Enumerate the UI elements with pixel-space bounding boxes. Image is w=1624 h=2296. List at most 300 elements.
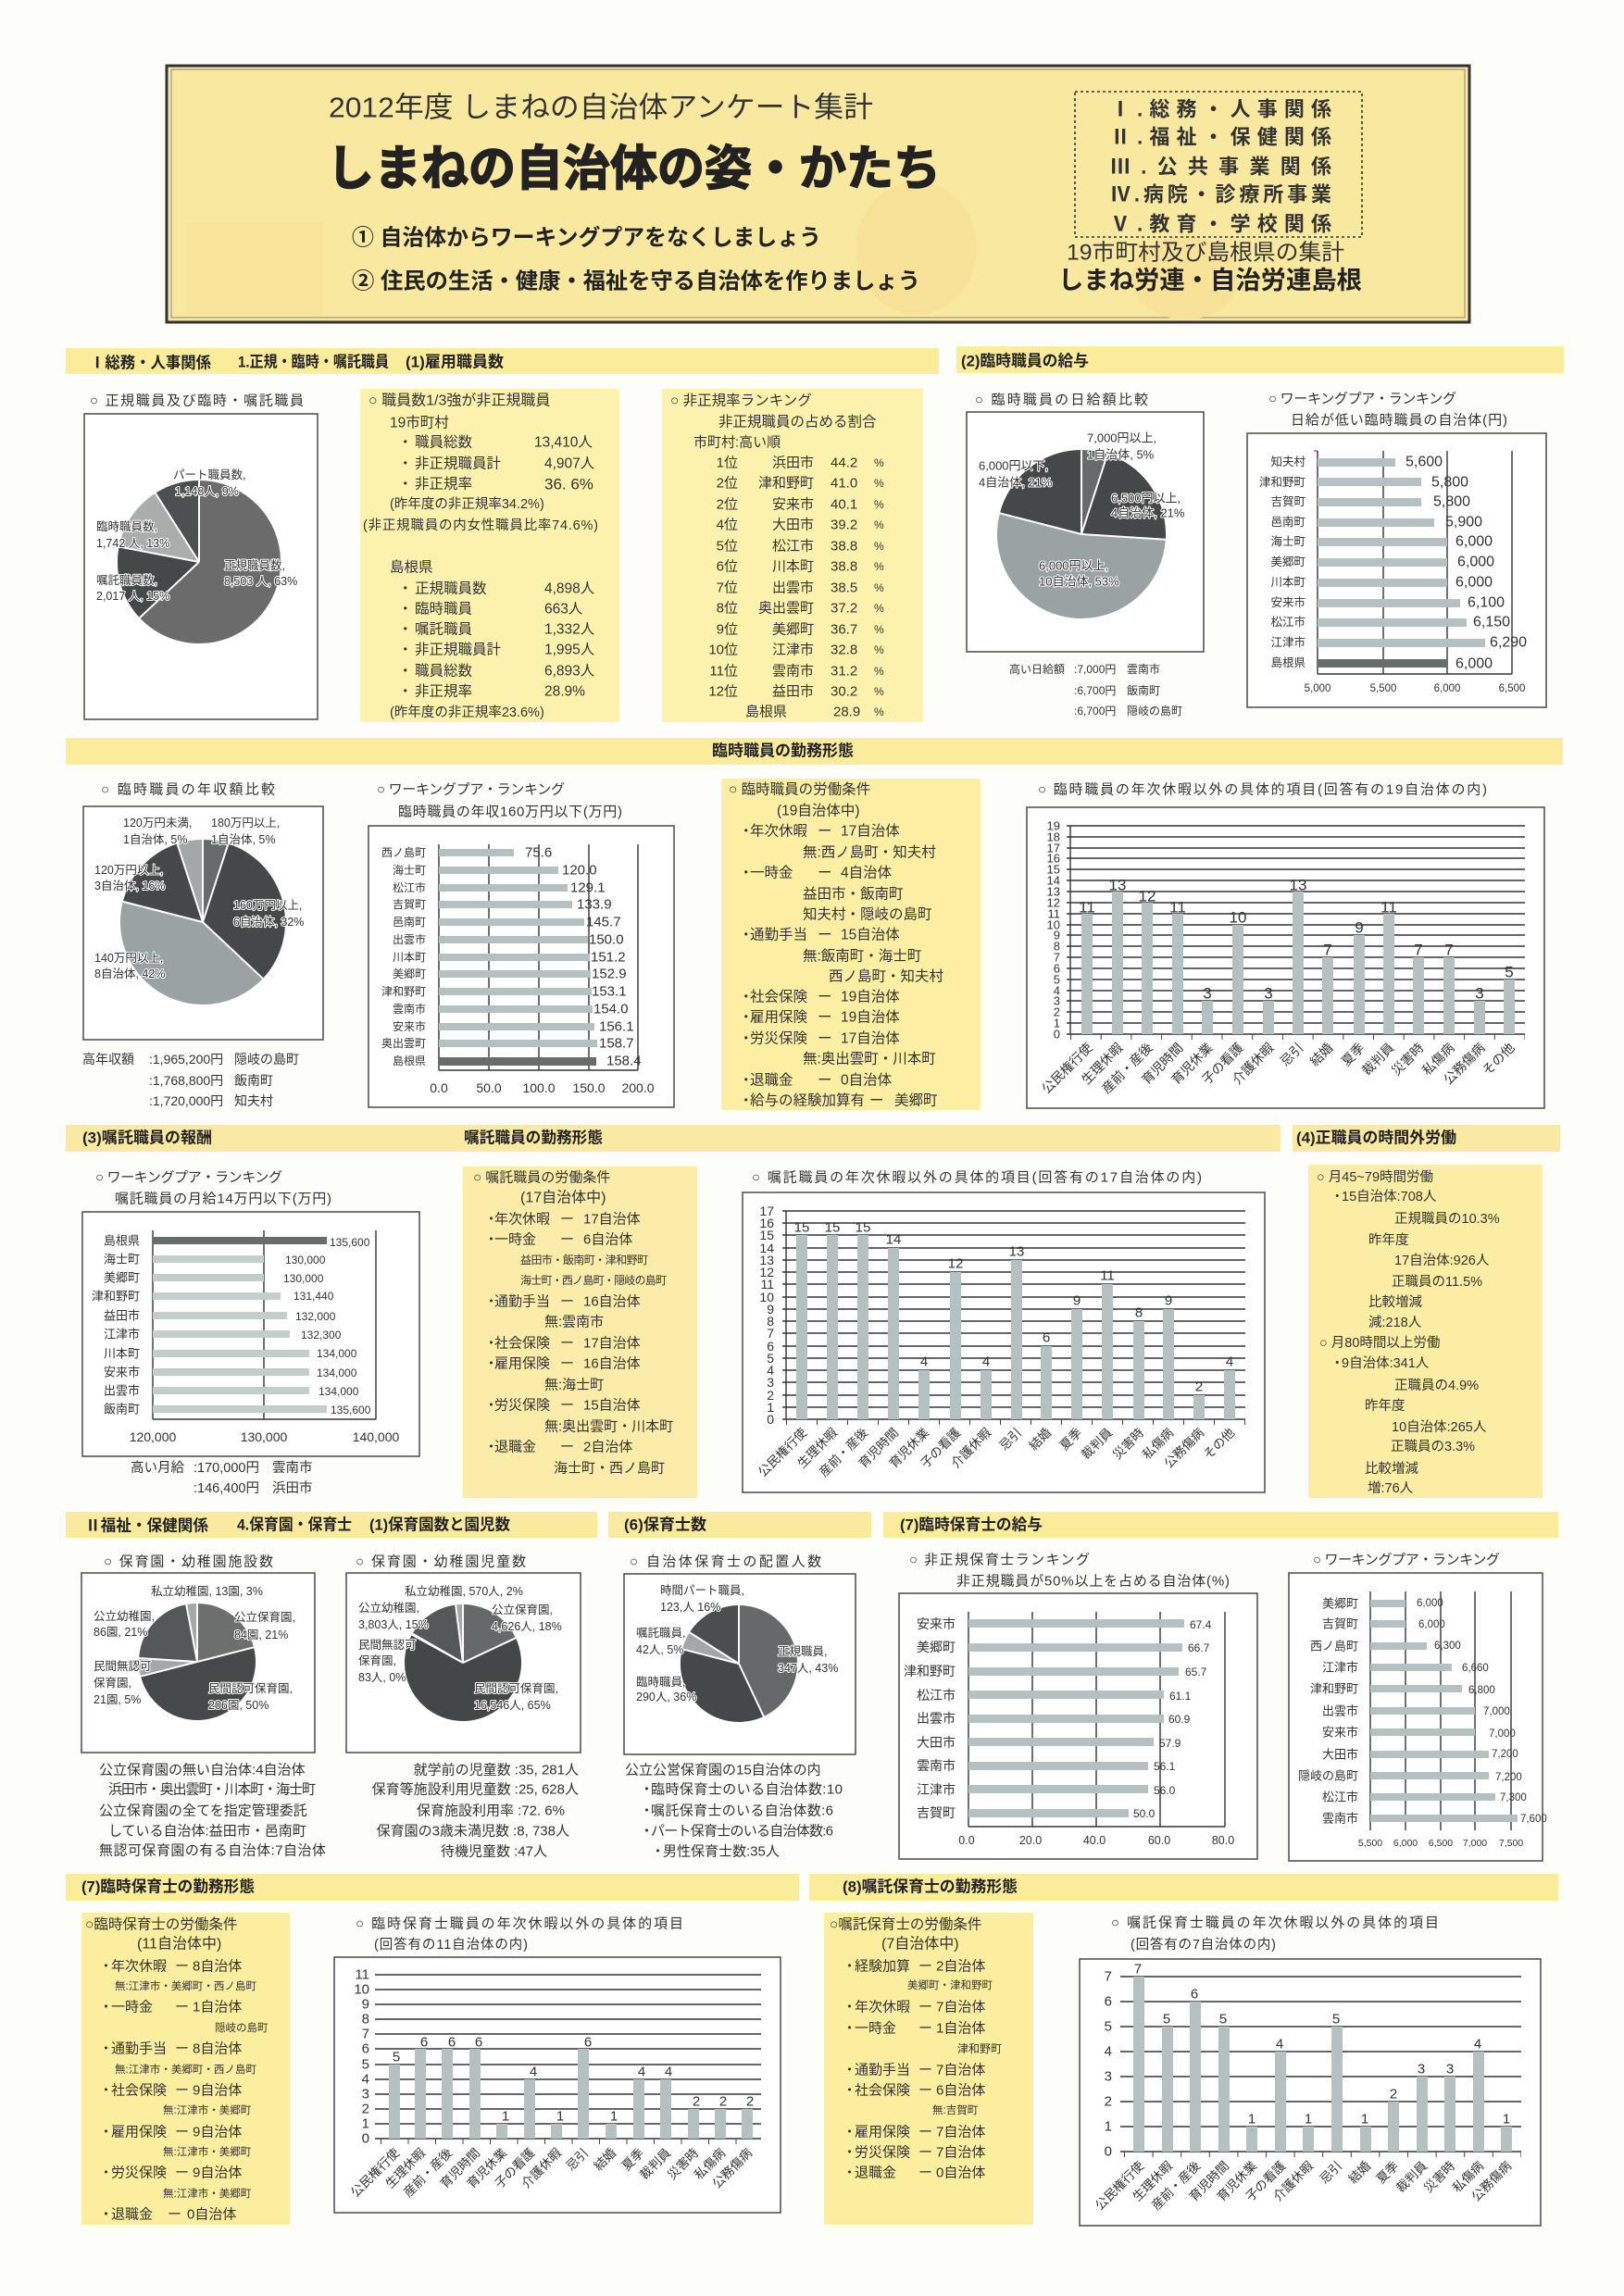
bar chart: 江津市 xyxy=(104,1328,140,1341)
panel: non-regular rate ranking: 雲南市 xyxy=(772,663,814,680)
bar chart: 島根県 xyxy=(104,1233,140,1248)
bar chart: 6,100 xyxy=(1468,594,1505,611)
highest income note: :1,965,200円 xyxy=(149,1052,223,1067)
column chart: 公務傷病 xyxy=(1162,1426,1206,1470)
panel: annual income pie xyxy=(82,781,323,1108)
panel: commissioned staff conditions: ー xyxy=(560,1335,574,1352)
panel: commissioned staff conditions: ・ xyxy=(484,1439,498,1455)
column chart: 私傷病 xyxy=(1140,1426,1176,1462)
panel: commissioned nursery teacher conditions: 0自治体 xyxy=(936,2165,985,2181)
panel: overtime: 比較増減 xyxy=(1368,1294,1422,1310)
panel: non-regular staff summary: 1,995人 xyxy=(544,643,595,657)
panel: commissioned nursery teacher conditions: ・ xyxy=(843,2020,856,2037)
panel: non-regular rate ranking: 大田市 xyxy=(772,517,814,533)
section bar: general affairs: Ⅰ総務・人事関係 xyxy=(90,354,211,372)
column chart: 生理休暇 xyxy=(1131,2159,1175,2203)
bar chart: 美郷町 xyxy=(1322,1596,1358,1611)
bar chart: 132,000 xyxy=(295,1310,336,1323)
nursery notes: 公立保育園の無い自治体:4自治体 xyxy=(99,1763,306,1778)
panel: temporary staff conditions: 15自治体 xyxy=(841,926,900,942)
pie labels: 206園, 50% xyxy=(208,1699,269,1712)
bar chart: 130,000 xyxy=(241,1429,288,1444)
panel: temporary staff conditions: ー xyxy=(818,1009,832,1026)
bar chart: 20.0 xyxy=(1019,1834,1042,1847)
pie labels: 1自治体, 5% xyxy=(211,833,275,846)
column chart: 産前・産後 xyxy=(400,2145,456,2200)
panel: non-regular rate ranking: % xyxy=(874,623,884,636)
bar chart: 134,000 xyxy=(319,1385,359,1398)
pie labels: 347人, 43% xyxy=(778,1662,838,1675)
panel: non-regular rate ranking: 4位 xyxy=(717,517,738,533)
column chart: 3 xyxy=(767,1375,774,1390)
column chart: 裁判員 xyxy=(637,2146,673,2182)
panel: temporary staff conditions: ー xyxy=(869,1092,884,1109)
panel: non-regular staff summary: ・ xyxy=(398,455,413,472)
column chart: 15 xyxy=(825,1220,840,1235)
column chart: 子の看護 xyxy=(1199,1040,1246,1087)
panel: commissioned nursery teacher conditions: 労災保険 xyxy=(855,2144,910,2161)
panel: non-regular rate ranking: % xyxy=(874,540,884,553)
bar chart: 6,300 xyxy=(1434,1641,1461,1652)
bar chart: 邑南町 xyxy=(1270,515,1305,529)
panel: temporary staff conditions: 一時金 xyxy=(750,865,793,881)
bar chart: 7,000 xyxy=(1489,1728,1516,1740)
column chart: 14 xyxy=(886,1231,901,1248)
pie labels: 86園, 21% xyxy=(94,1626,147,1639)
column chart: 15 xyxy=(1047,863,1060,876)
column chart: 5 xyxy=(1163,2011,1170,2028)
bar chart xyxy=(904,1612,1234,1847)
panel: non-regular staff summary: ・ xyxy=(398,643,413,657)
pie labels: 21園, 5% xyxy=(94,1693,141,1706)
pie labels: 8自治体, 42% xyxy=(94,967,165,980)
section bar: commissioned nursery teacher conditions: (8)嘱託保育士の勤務形態 xyxy=(843,1878,1018,1896)
panel: non-regular rate ranking: 12位 xyxy=(708,683,738,700)
bar chart: 出雲市 xyxy=(917,1711,956,1726)
column chart: 災害時 xyxy=(1110,1425,1147,1462)
panel: temporary staff conditions: 給与の経験加算有 xyxy=(750,1091,865,1109)
panel: annual income ranking: 臨時職員の年収160万円以下(万円) xyxy=(398,804,622,820)
bar chart xyxy=(1259,451,1527,694)
highest monthly pay note: 高い月給 xyxy=(131,1460,184,1476)
panel: non-regular staff summary: ・ xyxy=(398,435,413,450)
bar chart: 130,000 xyxy=(285,1254,326,1267)
panel: temporary staff leave chart xyxy=(1027,781,1544,1108)
column chart: 17 xyxy=(759,1204,774,1218)
heading: ○ 臨時保育士職員の年次休暇以外の具体的項目 xyxy=(356,1916,683,1931)
panel: non-regular staff summary: (昨年度の非正規率34.2%) xyxy=(390,496,544,512)
panel: commissioned nursery teacher conditions: 2自治体 xyxy=(936,1959,985,1974)
column chart: 11 xyxy=(355,1966,369,1983)
panel: non-regular staff summary: 663人 xyxy=(544,602,583,617)
pie labels: 160万円以上, xyxy=(233,899,302,912)
bar chart: 5,800 xyxy=(1433,494,1470,509)
panel: commissioned nursery teacher conditions: ・ xyxy=(843,2165,856,2181)
panel: temporary nursery teacher conditions: ー xyxy=(175,1959,189,1974)
nursery notes xyxy=(99,1763,326,1859)
child count notes: 保育施設利用率 :72. 6% xyxy=(417,1803,565,1818)
panel: commissioned staff conditions: ・ xyxy=(484,1294,498,1309)
publisher: しまね労連・自治労連島根 xyxy=(1058,267,1362,294)
panel: commissioned staff conditions: ー xyxy=(560,1355,574,1372)
panel: non-regular staff summary: 13,410人 xyxy=(534,435,593,450)
section bar: temporary staff working conditions: 臨時職員の勤務形態 xyxy=(712,742,854,759)
highest daily wage note: 雲南市 xyxy=(1127,662,1160,676)
bar chart: 奥出雲町 xyxy=(381,1037,426,1050)
pie labels: 83人, 0% xyxy=(358,1671,406,1684)
bar chart: 50.0 xyxy=(476,1080,502,1095)
column chart: 1 xyxy=(1054,1017,1060,1029)
panel: temporary staff conditions: ・ xyxy=(739,1031,754,1046)
bar chart: 大田市 xyxy=(1322,1748,1358,1761)
panel: non-regular staff summary: 19市町村 xyxy=(390,415,449,431)
column chart: 育児休業 xyxy=(465,2145,510,2190)
panel: temporary staff conditions: 退職金 xyxy=(750,1072,793,1089)
bar chart: 5,000 xyxy=(1305,683,1330,694)
column chart: 9 xyxy=(362,1996,369,2013)
column chart: 4 xyxy=(665,2065,672,2079)
column chart: 私傷病 xyxy=(1419,1040,1457,1078)
child count notes xyxy=(372,1763,579,1859)
highest daily wage note: :6,700円 xyxy=(1074,684,1116,697)
column chart: 13 xyxy=(759,1253,774,1267)
column chart: 災害時 xyxy=(1421,2158,1458,2195)
pie chart xyxy=(412,1604,516,1703)
panel: temporary staff conditions: 無:奥出雲町・川本町 xyxy=(803,1050,936,1067)
column chart: 9 xyxy=(1355,918,1364,937)
bar chart: 雲南市 xyxy=(1322,1811,1358,1826)
column chart: 10 xyxy=(354,1981,369,1998)
column chart: 12 xyxy=(1139,887,1156,905)
column chart: 3 xyxy=(1054,994,1060,1007)
highest income note: 飯南町 xyxy=(234,1073,273,1088)
panel: temporary staff conditions: 社会保険 xyxy=(750,989,808,1005)
bar chart: 158.7 xyxy=(599,1035,634,1052)
bar chart: 130,000 xyxy=(283,1272,324,1285)
column chart: 9 xyxy=(1073,1292,1081,1309)
bar chart: 6,000 xyxy=(1455,574,1493,591)
panel: commissioned nursery teacher conditions: 無:吉賀町 xyxy=(932,2103,979,2116)
bar chart: 200.0 xyxy=(621,1080,655,1095)
column chart: 19 xyxy=(1047,818,1060,833)
bar chart: 6,000 xyxy=(1434,683,1460,694)
panel: temporary staff conditions: ・ xyxy=(739,928,754,942)
main title: しまねの自治体の姿・かたち xyxy=(327,143,941,196)
panel: commissioned staff conditions: 無:雲南市 xyxy=(544,1315,604,1329)
bar chart: 65.7 xyxy=(1185,1666,1207,1678)
contents list: Ⅴ.教育・学校関係 xyxy=(1110,213,1331,235)
pie labels: 保育園, xyxy=(94,1676,131,1690)
panel: commissioned staff conditions: ー xyxy=(560,1211,574,1228)
panel: commissioned staff conditions: ー xyxy=(560,1231,574,1248)
panel: temporary nursery teacher conditions: ・ xyxy=(99,2083,113,2098)
section bar: welfare and nurseries xyxy=(66,1512,597,1538)
column chart: 14 xyxy=(1047,874,1060,887)
bar chart: 大田市 xyxy=(917,1735,956,1750)
column chart: 5 xyxy=(362,2057,369,2072)
bar chart: 吉賀町 xyxy=(1322,1616,1358,1631)
highest daily wage note: 飯南町 xyxy=(1127,683,1160,697)
bar chart: 島根県 xyxy=(393,1054,426,1067)
pie labels: 時間パート職員, xyxy=(660,1584,744,1597)
panel: overtime: ・ xyxy=(1330,1190,1344,1204)
child count notes: 保育園の3歳未満児数 :8, 738人 xyxy=(377,1824,569,1839)
column chart: 9 xyxy=(1054,928,1060,942)
panel: non-regular rate ranking: 36.7 xyxy=(831,622,857,637)
bar chart: 80.0 xyxy=(1212,1834,1234,1847)
bar chart: 6,000 xyxy=(1455,533,1493,550)
slogan 2: ② 住民の生活・健康・福祉を守る自治体を作りましょう xyxy=(352,268,920,294)
panel: non-regular staff summary: 非正規職員計 xyxy=(415,455,502,472)
panel: non-regular staff summary: 4,907人 xyxy=(544,455,595,472)
panel: temporary staff conditions: 労災保険 xyxy=(750,1029,808,1046)
panel: overtime xyxy=(1308,1165,1543,1498)
panel: commissioned nursery teacher conditions: ー xyxy=(918,2000,932,2015)
bar chart: 出雲市 xyxy=(104,1383,140,1398)
bar chart: 海士町 xyxy=(104,1252,140,1267)
bar chart: 津和野町 xyxy=(1310,1681,1358,1696)
column chart: 裁判員 xyxy=(1393,2159,1430,2195)
pie labels: 公立幼稚園, xyxy=(358,1601,419,1615)
pie chart xyxy=(139,1603,254,1697)
panel: commissioned staff conditions: 海士町・西ノ島町・隠岐の島町 xyxy=(520,1273,667,1287)
panel: commissioned nursery teacher conditions: 6自治体 xyxy=(936,2083,985,2098)
panel: non-regular rate ranking: 松江市 xyxy=(772,539,814,554)
column chart: 公務傷病 xyxy=(1469,2159,1514,2203)
column chart: 産前・産後 xyxy=(1099,1040,1156,1096)
panel: commissioned nursery teacher conditions: ー xyxy=(918,2165,932,2181)
bar chart: 7,600 xyxy=(1520,1814,1547,1825)
bar chart: 7,500 xyxy=(1499,1838,1523,1849)
bar chart: 飯南町 xyxy=(104,1402,140,1416)
panel: commissioned staff conditions: 社会保険 xyxy=(494,1335,550,1352)
pie labels xyxy=(96,468,297,603)
panel: overtime: ○ 月80時間以上労働 xyxy=(1319,1335,1440,1351)
teacher notes: 臨時保育士のいる自治体数:10 xyxy=(651,1781,843,1798)
panel: non-regular rate ranking: 28.9 xyxy=(833,704,860,720)
pie labels: 2,017 人, 15% xyxy=(96,590,169,603)
panel: non-regular rate ranking: 7位 xyxy=(717,580,738,596)
panel: non-regular staff summary xyxy=(360,389,619,722)
panel: commissioned nursery teacher conditions: 退職金 xyxy=(855,2165,896,2181)
bar chart: 132,300 xyxy=(301,1329,342,1341)
bar chart: 江津市 xyxy=(1270,636,1305,649)
bar chart: 60.0 xyxy=(1148,1834,1170,1847)
section bar: temporary nursery teacher conditions: (7)臨時保育士の勤務形態 xyxy=(81,1878,255,1896)
section bar: temporary nursery teacher pay: (7)臨時保育士の給与 xyxy=(900,1515,1043,1533)
column chart: 2 xyxy=(719,2094,727,2109)
column chart: 結婚 xyxy=(1346,2158,1374,2186)
column chart: 0 xyxy=(1105,2144,1112,2159)
teacher notes: ・ xyxy=(651,1844,665,1859)
panel: temporary nursery teacher conditions: 雇用保険 xyxy=(111,2124,167,2140)
column chart: 3 xyxy=(1446,2061,1454,2078)
panel: overtime: 昨年度 xyxy=(1365,1398,1405,1414)
pie labels: 120万円以上, xyxy=(94,864,163,877)
column chart: 2 xyxy=(1390,2087,1397,2102)
bar chart: 川本町 xyxy=(393,951,426,964)
section bar: commissioned staff pay and conditions: 嘱託職員の勤務形態 xyxy=(464,1129,603,1146)
panel: non-regular staff summary: 臨時職員 xyxy=(415,600,472,617)
highest monthly pay note xyxy=(131,1460,313,1496)
panel: non-regular rate ranking: % xyxy=(874,456,884,469)
panel: temporary nursery teacher conditions: 一時金 xyxy=(111,2000,153,2015)
column chart: 3 xyxy=(1203,985,1212,1002)
panel: temporary staff conditions: 17自治体 xyxy=(841,1029,900,1046)
column chart: 育児休業 xyxy=(1215,2158,1260,2203)
panel: overtime: 正職員の4.9% xyxy=(1394,1378,1479,1393)
panel: non-regular rate ranking: % xyxy=(874,477,884,490)
bar chart: 75.6 xyxy=(525,844,552,861)
column chart: 子の看護 xyxy=(493,2145,538,2190)
panel: commissioned nursery teacher conditions xyxy=(824,1913,1033,2225)
bar chart: 出雲市 xyxy=(393,933,426,946)
panel: temporary staff conditions: 19自治体 xyxy=(841,1009,900,1026)
column chart: 4 xyxy=(1276,2037,1283,2052)
section bar: overtime xyxy=(1293,1125,1560,1152)
pie labels: 6,000円以下, xyxy=(979,459,1048,472)
panel: commissioned staff conditions: 16自治体 xyxy=(583,1294,641,1309)
panel: commissioned nursery teacher conditions: 津和野町 xyxy=(957,2042,1002,2055)
column chart: 4 xyxy=(920,1354,928,1370)
bar chart: 6,000 xyxy=(1417,1598,1443,1609)
bar chart: 津和野町 xyxy=(904,1664,956,1678)
section bar: welfare and nurseries: (1)保育園数と園児数 xyxy=(369,1516,510,1533)
panel: non-regular nursery teacher ranking xyxy=(899,1552,1257,1859)
pie chart xyxy=(123,840,263,980)
bar chart: 6,500 xyxy=(1429,1838,1453,1849)
panel: commissioned staff conditions: 一時金 xyxy=(494,1231,536,1248)
bar chart: 美郷町 xyxy=(393,967,426,980)
panel: temporary nursery teacher conditions: ー xyxy=(175,2124,189,2140)
section bar: general affairs: (1)雇用職員数 xyxy=(406,354,504,370)
panel: commissioned nursery teacher conditions: ・ xyxy=(843,2063,856,2078)
column chart: 私傷病 xyxy=(692,2146,728,2182)
panel: nursery children pie xyxy=(346,1554,581,1859)
section bar: temporary staff pay xyxy=(956,346,1564,373)
column chart: 10 xyxy=(759,1290,774,1304)
pie labels: 290人, 36% xyxy=(636,1691,696,1703)
pie labels: 3自治体, 16% xyxy=(94,880,165,892)
highest income note: :1,720,000円 xyxy=(149,1093,223,1108)
panel: commissioned nursery teacher conditions: 7自治体 xyxy=(936,2124,985,2140)
bar chart: 6,290 xyxy=(1490,635,1527,650)
column chart: 4 xyxy=(767,1363,774,1378)
panel: temporary nursery teacher conditions: ・ xyxy=(99,1959,113,1974)
panel: commissioned staff conditions: 17自治体 xyxy=(583,1211,641,1228)
bar chart: 6,000 xyxy=(1418,1619,1445,1630)
bar chart: 6,000 xyxy=(1457,554,1494,570)
panel: nursery teacher pay ranking xyxy=(1289,1552,1547,1861)
pie labels xyxy=(636,1584,838,1703)
heading: ○ 臨時職員の年収額比較 xyxy=(101,781,275,798)
pie labels xyxy=(358,1584,562,1712)
heading: ○ 保育園・幼稚園施設数 xyxy=(104,1554,273,1570)
bar chart: 吉賀町 xyxy=(1270,495,1305,508)
bar chart: 川本町 xyxy=(1270,576,1305,589)
panel: commissioned nursery teacher conditions: ○嘱託保育士の労働条件 xyxy=(830,1916,981,1933)
column chart: 5 xyxy=(1054,972,1060,987)
section bar: commissioned nursery teacher conditions xyxy=(809,1874,1558,1901)
panel: commissioned nursery teacher conditions: ・ xyxy=(843,1959,856,1974)
panel: overtime: ○ 月45~79時間労働 xyxy=(1317,1169,1433,1185)
child count notes: 就学前の児童数 :35, 281人 xyxy=(414,1763,579,1778)
panel: non-regular rate ranking: 安来市 xyxy=(772,496,814,513)
bar chart: 西ノ島町 xyxy=(1310,1639,1358,1653)
column chart: 0 xyxy=(1054,1028,1060,1041)
pie labels: 民間無認可 xyxy=(94,1659,152,1673)
heading: ○ 嘱託職員の年次休暇以外の具体的項目(回答有の17自治体の内) xyxy=(752,1170,1202,1185)
panel: temporary nursery teacher conditions: 無:江津市・美郷町・西ノ島町 xyxy=(115,1979,257,1992)
contents list: Ⅲ.公共事業関係 xyxy=(1110,156,1331,178)
panel: non-regular rate ranking: 38.8 xyxy=(831,539,857,554)
bar chart: 40.0 xyxy=(1083,1834,1106,1847)
panel: temporary nursery teacher conditions: (11自治体中) xyxy=(137,1935,221,1952)
bar chart: 安来市 xyxy=(917,1616,956,1631)
panel: commissioned nursery teacher conditions: ・ xyxy=(843,2083,856,2098)
bar chart: 0.0 xyxy=(958,1834,975,1847)
bar chart: 67.4 xyxy=(1190,1618,1212,1631)
column chart: 11 xyxy=(1380,898,1397,917)
panel: commissioned nursery teacher conditions: 経験加算 xyxy=(855,1957,910,1974)
column chart: 夏季 xyxy=(1374,2159,1401,2186)
panel: temporary staff conditions: ・ xyxy=(739,1072,754,1089)
bar chart: 7,000 xyxy=(1463,1838,1487,1849)
panel: commissioned staff conditions: 益田市・飯南町・津和野町 xyxy=(520,1253,648,1267)
panel: temporary nursery teacher conditions: ○臨時保育士の労働条件 xyxy=(85,1916,237,1933)
highest income note xyxy=(82,1052,299,1108)
panel: commissioned nursery teacher conditions: ・ xyxy=(843,2000,856,2015)
column chart: 0 xyxy=(362,2131,369,2146)
bar chart: 雲南市 xyxy=(917,1758,956,1773)
panel: commissioned nursery teacher leave chart xyxy=(1080,1915,1541,2226)
bar chart: 5,500 xyxy=(1370,683,1396,694)
panel: commissioned staff conditions: ○ 嘱託職員の労働条件 xyxy=(473,1170,610,1185)
panel: monthly pay ranking: 嘱託職員の月給14万円以下(万円) xyxy=(115,1191,331,1207)
bar chart: 知夫村 xyxy=(1270,455,1305,468)
column chart: 育児休業 xyxy=(887,1425,932,1470)
panel: non-regular staff summary: ・ xyxy=(398,581,413,596)
column chart: 2 xyxy=(767,1388,774,1403)
column chart: 13 xyxy=(1290,876,1306,894)
panel: overtime: 正職員の3.3% xyxy=(1391,1439,1475,1454)
column chart: 7 xyxy=(1444,941,1454,959)
panel: commissioned staff conditions: 無:海士町 xyxy=(544,1378,604,1392)
pie labels: 公立保育園, xyxy=(492,1603,553,1616)
panel: overtime: 比較増減 xyxy=(1365,1461,1418,1477)
panel: temporary nursery teacher conditions: ー xyxy=(175,2000,189,2015)
column chart: 14 xyxy=(759,1241,774,1255)
bar chart: 61.1 xyxy=(1169,1690,1192,1703)
pie labels: 4,626人, 18% xyxy=(492,1620,562,1633)
bar chart: 152.9 xyxy=(592,967,627,981)
panel: temporary staff conditions: 0自治体 xyxy=(841,1072,893,1089)
column chart: 7 xyxy=(1414,941,1423,959)
panel: temporary nursery teacher conditions: 年次休暇 xyxy=(111,1959,167,1974)
highest income note: 高年収額 xyxy=(82,1052,134,1067)
bar chart: 134,000 xyxy=(317,1347,357,1360)
bar chart: 5,600 xyxy=(1405,454,1443,470)
highest daily wage note: :7,000円 xyxy=(1074,663,1116,676)
column chart xyxy=(1092,1961,1521,2213)
panel: temporary nursery teacher conditions: 1自治体 xyxy=(193,2000,242,2015)
column chart: 3 xyxy=(1264,985,1273,1002)
panel: non-regular rate ranking: 8位 xyxy=(717,600,738,617)
column chart: その他 xyxy=(1480,1040,1518,1078)
bar chart: 西ノ島町 xyxy=(381,845,426,859)
bar chart: 安来市 xyxy=(393,1020,426,1033)
highest monthly pay note: :146,400円 xyxy=(194,1481,259,1496)
